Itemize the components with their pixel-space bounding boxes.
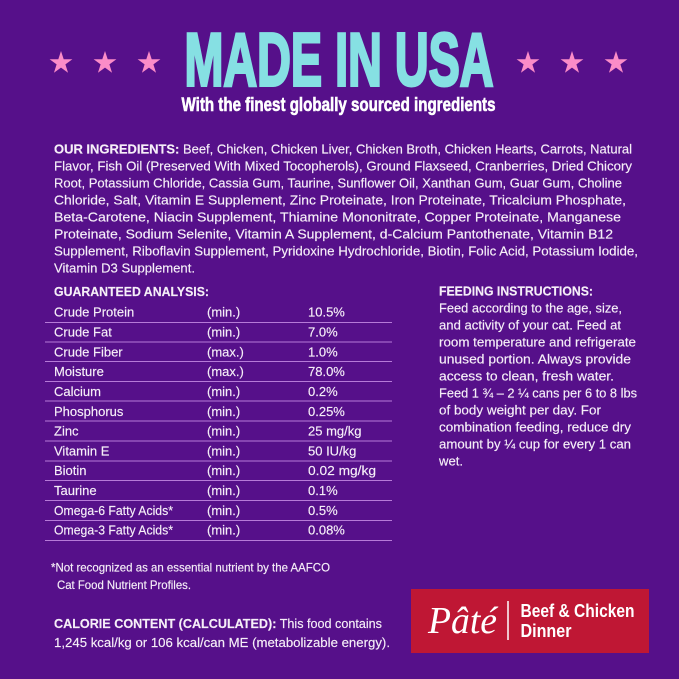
product name: Beef & Chicken <box>520 601 634 621</box>
feeding instructions: access to clean, fresh water. <box>439 368 614 384</box>
ingredients text <box>54 142 638 276</box>
calorie content <box>54 616 390 650</box>
guaranteed analysis table: 1.0% <box>308 344 338 360</box>
guaranteed analysis table: (min.) <box>207 384 240 399</box>
feeding instructions: combination feeding, reduce dry <box>439 420 632 434</box>
table heading: GUARANTEED ANALYSIS: <box>54 284 209 299</box>
guaranteed analysis table: (max.) <box>207 344 244 360</box>
guaranteed analysis table: 0.5% <box>308 503 338 518</box>
footnote: Cat Food Nutrient Profiles. <box>57 578 191 592</box>
guaranteed analysis table: Omega-3 Fatty Acids* <box>54 522 173 538</box>
left stars <box>50 51 160 73</box>
guaranteed analysis table <box>45 284 392 540</box>
feeding instructions: Feed according to the age, size, <box>439 300 622 316</box>
guaranteed analysis table: 7.0% <box>308 324 338 340</box>
product badge <box>411 589 649 653</box>
guaranteed analysis table: Taurine <box>54 483 97 498</box>
feeding instructions: room temperature and refrigerate <box>439 334 636 350</box>
guaranteed analysis table: (min.) <box>207 444 240 458</box>
guaranteed analysis table: (min.) <box>207 483 240 498</box>
guaranteed analysis table: Moisture <box>54 364 104 379</box>
guaranteed analysis table: 25 mg/kg <box>308 424 361 438</box>
calorie content: CALORIE CONTENT (CALCULATED): This food contains <box>54 616 382 631</box>
ingredients text: OUR INGREDIENTS: Beef, Chicken, Chicken Liver, Chicken Broth, Chicken Hearts, Carrots, Natural <box>54 142 632 156</box>
feeding instructions: wet. <box>438 454 463 468</box>
guaranteed analysis table: Vitamin E <box>54 444 110 458</box>
guaranteed analysis table: (min.) <box>207 522 240 538</box>
guaranteed analysis table: Phosphorus <box>54 404 124 419</box>
footnote: *Not recognized as an essential nutrient by the AAFCO <box>51 560 330 574</box>
ingredients text: Proteinate, Sodium Selenite, Vitamin A Supplement, d-Calcium Pantothenate, Vitamin B12 <box>54 226 613 242</box>
guaranteed analysis table: Crude Protein <box>54 304 134 320</box>
feeding instructions: amount by ¼ cup for every 1 can <box>439 436 631 452</box>
guaranteed analysis table: (min.) <box>207 324 240 340</box>
feeding instructions <box>438 284 637 468</box>
guaranteed analysis table: 0.08% <box>308 522 345 538</box>
feeding instructions: of body weight per day. For <box>439 402 602 418</box>
ingredients text: Vitamin D3 Supplement. <box>54 260 195 276</box>
guaranteed analysis table: (min.) <box>207 463 240 478</box>
ingredients text: Supplement, Riboflavin Supplement, Pyridoxine Hydrochloride, Biotin, Folic Acid, Potassium Iodide, <box>54 244 638 258</box>
guaranteed analysis table: 0.2% <box>308 384 338 399</box>
guaranteed analysis table: Zinc <box>54 424 79 438</box>
right stars <box>517 51 627 73</box>
guaranteed analysis table: 78.0% <box>308 364 345 379</box>
guaranteed analysis table: 10.5% <box>308 304 345 320</box>
script label: Pâté <box>427 600 499 642</box>
subtitle: With the finest globally sourced ingredients <box>182 94 496 116</box>
feeding instructions: unused portion. Always provide <box>439 352 631 366</box>
feeding instructions: Feed 1 ¾ – 2 ¼ cans per 6 to 8 lbs <box>439 386 637 400</box>
feeding instructions: and activity of your cat. Feed at <box>439 318 621 332</box>
footnote <box>51 560 330 592</box>
guaranteed analysis table: Biotin <box>54 463 87 478</box>
calorie content: 1,245 kcal/kg or 106 kcal/can ME (metabolizable energy). <box>54 635 390 650</box>
guaranteed analysis table: (min.) <box>207 424 240 438</box>
guaranteed analysis table: 50 IU/kg <box>308 444 356 458</box>
guaranteed analysis table: 0.02 mg/kg <box>308 463 376 478</box>
ingredients text: Root, Potassium Chloride, Cassia Gum, Taurine, Sunflower Oil, Xanthan Gum, Guar Gum, Choline <box>54 176 622 190</box>
guaranteed analysis table: (max.) <box>207 364 244 379</box>
ingredients text: Beta-Carotene, Niacin Supplement, Thiamine Mononitrate, Copper Proteinate, Manganese <box>54 210 621 224</box>
guaranteed analysis table: (min.) <box>207 304 240 320</box>
feeding instructions: FEEDING INSTRUCTIONS: <box>439 284 593 298</box>
ingredients text: Flavor, Fish Oil (Preserved With Mixed Tocopherols), Ground Flaxseed, Cranberries, Dried Chicory <box>54 158 632 174</box>
guaranteed analysis table: (min.) <box>207 503 240 518</box>
guaranteed analysis table: Calcium <box>54 384 101 399</box>
title: MADE IN USA <box>184 18 494 102</box>
guaranteed analysis table: Crude Fat <box>54 324 112 340</box>
guaranteed analysis table: Omega-6 Fatty Acids* <box>54 503 173 518</box>
ingredients text: Chloride, Salt, Vitamin E Supplement, Zinc Proteinate, Iron Proteinate, Tricalcium Phosphate, <box>54 192 626 208</box>
guaranteed analysis table: Crude Fiber <box>54 344 123 360</box>
guaranteed analysis table: (min.) <box>207 404 240 419</box>
guaranteed analysis table: 0.25% <box>308 404 345 419</box>
guaranteed analysis table: 0.1% <box>308 483 338 498</box>
product badge: Dinner <box>520 621 572 641</box>
